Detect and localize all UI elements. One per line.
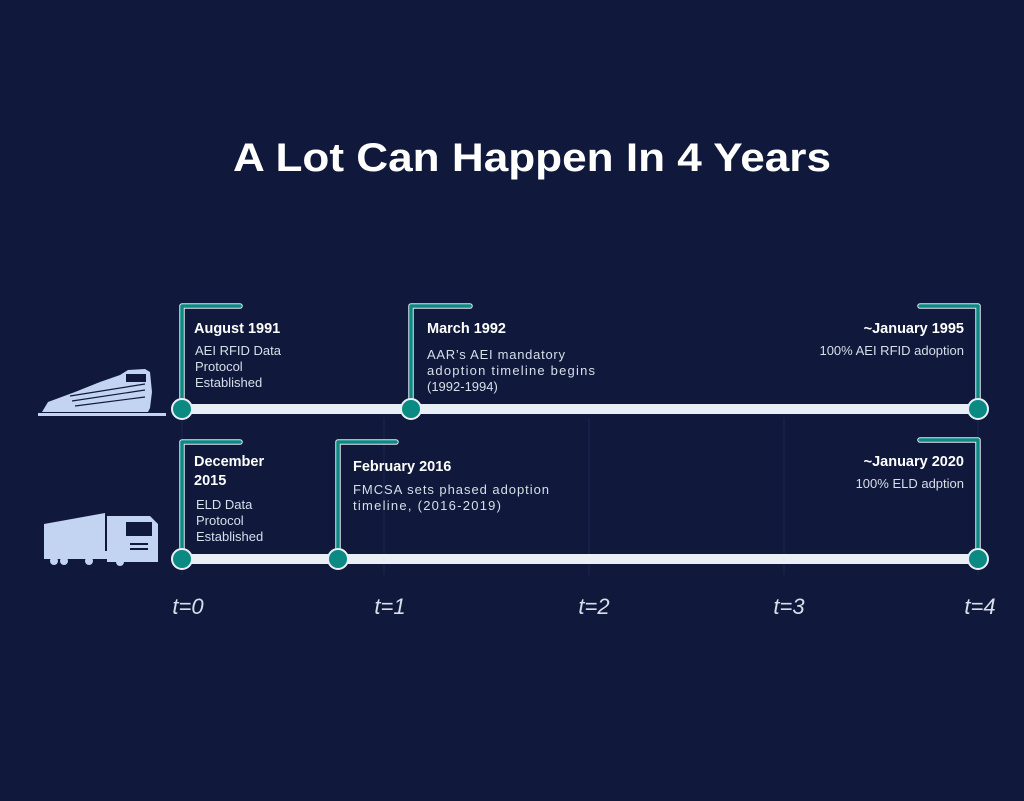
node markers xyxy=(172,399,988,419)
event text: January 2020 xyxy=(856,454,964,491)
event text: January 2020: 100% ELD adption xyxy=(856,476,964,491)
event text: March 1992 xyxy=(427,321,596,394)
event text: August 1991 xyxy=(194,321,282,390)
node markers xyxy=(172,549,988,569)
bracket: January 1995 xyxy=(920,306,978,409)
event text: March 1992: AAR’s AEI mandatory xyxy=(427,347,566,362)
timeline: rail (AEI RFID) xyxy=(172,306,988,419)
icon: train xyxy=(38,369,166,416)
bracket: August 1991 xyxy=(182,306,240,409)
event text: March 1992: adoption timeline begins xyxy=(427,363,596,378)
axis labels: t=0 xyxy=(172,594,204,619)
axis labels: t=1 xyxy=(374,594,406,619)
event text: December 2015: ELD Data xyxy=(196,497,253,512)
event text: December 2015: December xyxy=(194,454,264,470)
bracket: March 1992 xyxy=(411,306,470,409)
event text: August 1991: Established xyxy=(195,375,262,390)
event text: February 2016: timeline, (2016-2019) xyxy=(353,498,501,513)
event text: February 2016: February 2016 xyxy=(353,459,451,475)
event text: January 2020: ~January 2020 xyxy=(864,454,964,470)
bracket: December 2015 xyxy=(182,442,240,559)
event text: December 2015: Protocol xyxy=(196,513,244,528)
axis labels: t=3 xyxy=(773,594,805,619)
event text: March 1992: (1992-1994) xyxy=(427,379,498,394)
event text: January 1995 xyxy=(819,321,964,358)
event text: February 2016: FMCSA sets phased adoption xyxy=(353,482,549,497)
event text: December 2015: 2015 xyxy=(194,473,226,489)
event text: February 2016 xyxy=(353,459,549,513)
event text: August 1991: Protocol xyxy=(195,359,243,374)
event text: January 1995: 100% AEI RFID adoption xyxy=(819,343,964,358)
event text: January 1995: ~January 1995 xyxy=(864,321,964,337)
title: A Lot Can Happen In 4 Years xyxy=(233,136,831,180)
icon: truck xyxy=(44,513,158,566)
event text: March 1992: March 1992 xyxy=(427,321,506,337)
axis labels: t=4 xyxy=(964,594,996,619)
timeline: truck (ELD) xyxy=(172,440,988,569)
event text: December 2015: Established xyxy=(196,529,263,544)
event text: August 1991: August 1991 xyxy=(194,321,280,337)
bracket: January 2020 xyxy=(920,440,978,559)
axis labels xyxy=(172,594,996,619)
axis labels: t=2 xyxy=(578,594,610,619)
event text: December 2015 xyxy=(194,454,264,544)
bracket: February 2016 xyxy=(338,442,396,559)
event text: August 1991: AEI RFID Data xyxy=(195,343,282,358)
